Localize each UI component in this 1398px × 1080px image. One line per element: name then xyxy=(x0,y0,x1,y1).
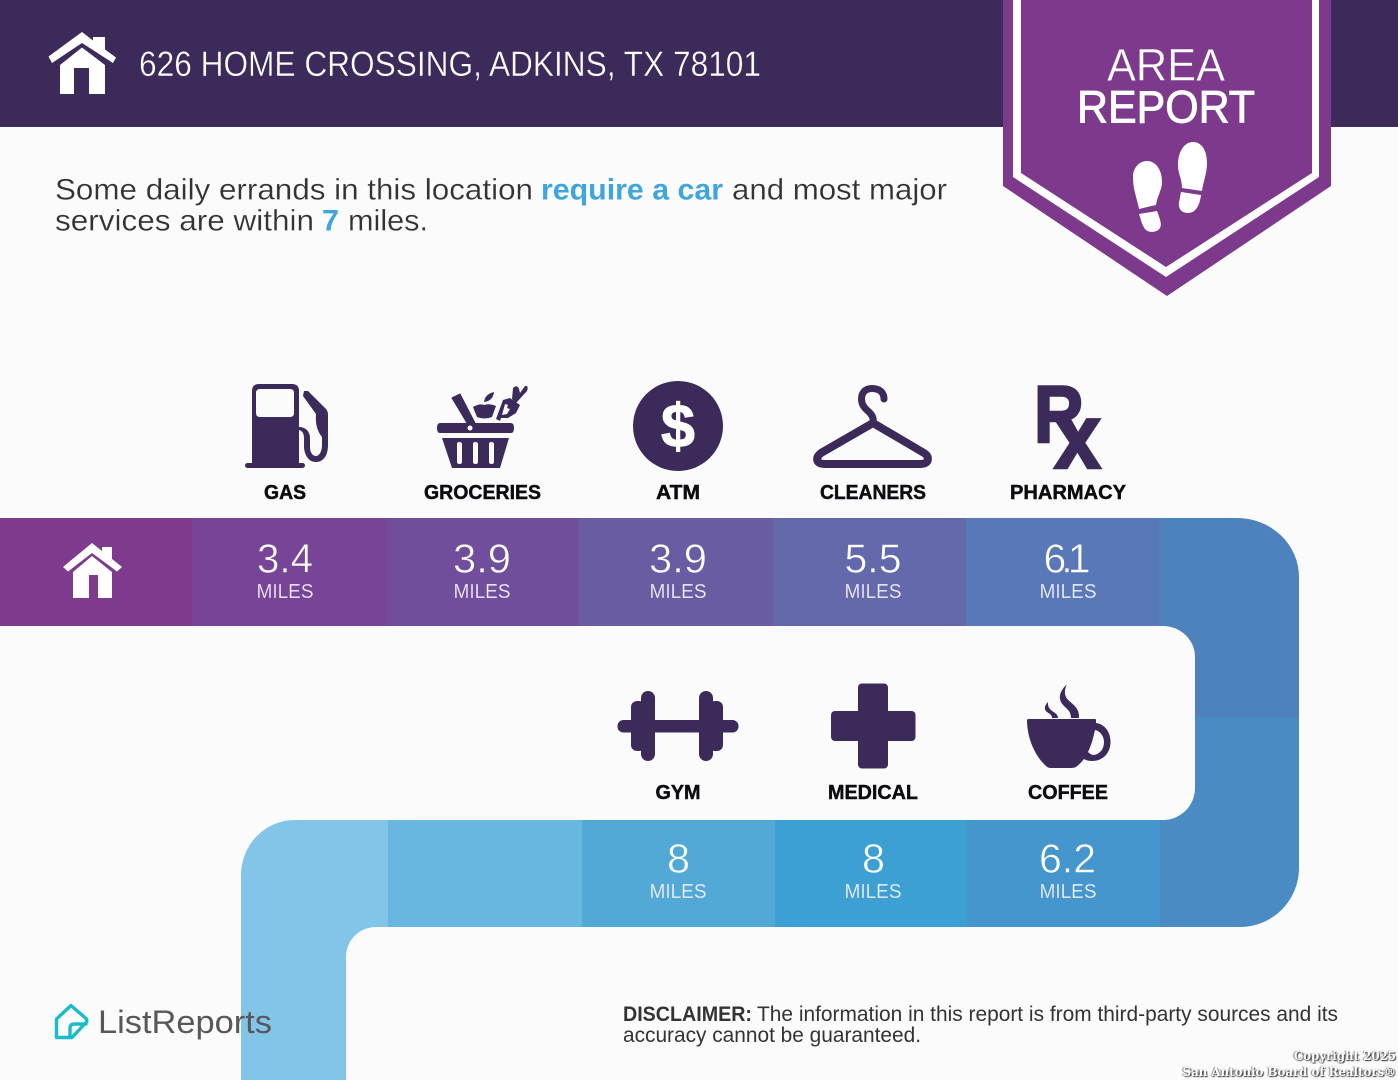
distance: pharmacy: 6.1 xyxy=(1044,536,1090,582)
distance: groceries xyxy=(453,536,511,603)
distance: atm: MILES xyxy=(650,581,706,603)
distance: medical xyxy=(844,836,902,903)
icon: coffee cup xyxy=(1027,684,1110,768)
distance: gas xyxy=(256,536,314,603)
route band: upper section xyxy=(0,518,1299,717)
category labels: lower row: GYM xyxy=(656,782,700,804)
distance: gym xyxy=(650,836,706,903)
distance: coffee: 6.2 xyxy=(1039,836,1096,882)
disclaimer: accuracy cannot be guaranteed. xyxy=(623,1024,921,1047)
badge title: AREA xyxy=(1107,40,1225,90)
distance: cleaners: MILES xyxy=(844,581,902,603)
distance: atm xyxy=(649,536,707,603)
distance: gas: 3.4 xyxy=(257,536,313,582)
icon: band house xyxy=(63,543,122,598)
category labels: lower row: COFFEE xyxy=(1028,782,1108,804)
distance: coffee xyxy=(1039,836,1096,903)
icon: atm dollar: $ xyxy=(661,392,695,460)
icon: rx: x xyxy=(1054,386,1101,488)
logo: listreports xyxy=(56,1004,272,1040)
badge title xyxy=(1077,40,1255,132)
icon: rx: R xyxy=(1034,370,1084,460)
distance: gym: MILES xyxy=(650,881,706,903)
distance: pharmacy: MILES xyxy=(1040,581,1096,603)
distance: medical: 8 xyxy=(862,836,885,882)
intro text xyxy=(55,174,947,238)
category labels: top row: PHARMACY xyxy=(1010,482,1127,504)
distance: pharmacy xyxy=(1040,536,1096,603)
logo wordmark: ListReports xyxy=(98,1004,272,1040)
disclaimer: The information in this report is from third-party sources and its xyxy=(757,1003,1338,1026)
distance: gas: MILES xyxy=(256,581,314,603)
category labels: lower row xyxy=(656,782,1108,804)
icon: hanger xyxy=(817,388,928,464)
distance: gym: 8 xyxy=(667,836,690,882)
disclaimer xyxy=(623,1003,1338,1047)
address: 626 HOME CROSSING, ADKINS, TX 78101 xyxy=(139,45,761,84)
category labels: lower row: MEDICAL xyxy=(828,782,918,804)
badge: area report xyxy=(1003,0,1331,296)
category labels: top row xyxy=(264,482,1127,504)
category labels: top row: GAS xyxy=(264,482,306,504)
icon: logo house xyxy=(56,1006,87,1038)
icon: groceries basket xyxy=(437,386,528,468)
distance: medical: MILES xyxy=(844,881,902,903)
intro text: miles. xyxy=(348,204,428,238)
intro text: 7 xyxy=(322,204,339,238)
copyright watermark xyxy=(1182,1049,1397,1078)
distance: coffee: MILES xyxy=(1040,881,1096,903)
icon: gas pump xyxy=(245,384,328,468)
intro text: Some daily errands in this location xyxy=(55,174,533,206)
distance: groceries: MILES xyxy=(454,581,510,603)
category labels: top row: GROCERIES xyxy=(424,482,541,504)
icon: header house xyxy=(48,32,116,94)
distance: atm: 3.9 xyxy=(649,536,707,582)
category labels: top row: ATM xyxy=(656,482,700,504)
disclaimer: DISCLAIMER: xyxy=(623,1003,752,1026)
category labels: top row: CLEANERS xyxy=(820,482,926,504)
icon: atm dollar xyxy=(633,381,723,471)
distance: cleaners xyxy=(844,536,902,603)
icon: medical cross xyxy=(831,684,916,768)
distance: cleaners: 5.5 xyxy=(844,536,902,582)
icon: footprints xyxy=(1133,142,1207,232)
intro text: require a car xyxy=(541,174,724,206)
header bar xyxy=(0,0,1398,127)
badge title: REPORT xyxy=(1077,82,1255,132)
route band: lower section xyxy=(241,717,1299,1080)
icon: gym dumbbell xyxy=(618,691,738,761)
copyright watermark: San Antonio Board of Realtors® xyxy=(1183,1064,1396,1078)
intro text: services are within xyxy=(55,204,314,238)
intro text: and most major xyxy=(732,174,947,206)
icon: rx xyxy=(1034,370,1101,488)
distance: groceries: 3.9 xyxy=(453,536,511,582)
copyright watermark: Copyright 2025 xyxy=(1294,1049,1396,1063)
